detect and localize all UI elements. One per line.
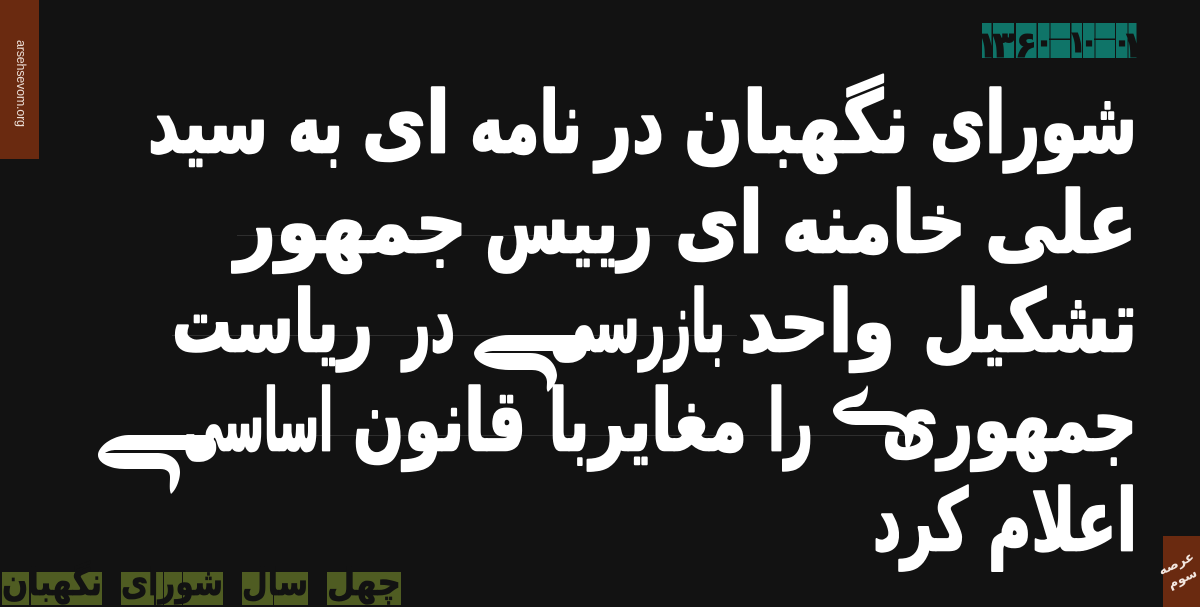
headline line 4 (183, 372, 1137, 471)
headline line 3: واحد (740, 273, 895, 372)
logo block: عرصه (1156, 549, 1197, 579)
date stamp: ۰ (1035, 25, 1053, 60)
date stamp: — (1094, 25, 1116, 50)
headline line 3: ریاست (172, 273, 373, 372)
date stamp: ۳ (993, 25, 1015, 66)
headline line 2: ای (675, 174, 763, 273)
headline line 1 (148, 74, 1137, 173)
headline line 5: کرد (873, 472, 968, 571)
headline line 5 (873, 472, 1137, 571)
headline line 1: ای (362, 74, 450, 173)
headline line 3: بازرسی (550, 273, 725, 372)
side tab: website (0, 0, 39, 159)
logo block (1156, 536, 1200, 607)
series title: olive blocks: شورای (121, 560, 223, 604)
date stamp: ۱ (976, 25, 998, 66)
swash: line 3 (474, 335, 590, 392)
date stamp: — (1049, 25, 1071, 50)
headline line 4: را (768, 372, 813, 471)
headline line 1: به (288, 74, 343, 173)
headline line 2: رییس (485, 174, 653, 273)
headline line 2: جمهور (232, 174, 467, 273)
swash: line 4 left (98, 435, 210, 494)
date stamp: ۶ (1015, 25, 1037, 66)
series title: olive blocks: چهل (327, 560, 401, 604)
date stamp: ۱ (1122, 25, 1143, 66)
headline line 4: با (549, 372, 589, 471)
headline line 3 (172, 273, 1137, 372)
headline line 1: در (593, 74, 664, 173)
headline line 3: در (401, 273, 455, 372)
series title: olive blocks: نگهبان (2, 560, 102, 604)
headline line 1: نامه (470, 74, 582, 173)
swash: line 4 middle (833, 385, 914, 450)
date stamp: ۰ (1113, 25, 1131, 60)
logo block: سوم (1166, 566, 1200, 592)
headline line 3: تشکیل (923, 273, 1137, 372)
date stamp: ۱ (1068, 25, 1086, 60)
headline line 4: اساسی (183, 372, 333, 471)
date stamp: ۰ (1080, 25, 1098, 60)
headline line 2: علی (985, 174, 1137, 273)
headline (148, 74, 1137, 571)
series title: olive blocks: سال (242, 560, 308, 604)
headline line 5: اعلام (988, 472, 1137, 571)
side tab: website: arsehsevom.org (14, 40, 28, 127)
headline line 4: مغایر (587, 372, 747, 471)
series title: olive blocks (2, 560, 401, 605)
date stamp (976, 23, 1143, 66)
headline line 2 (232, 174, 1137, 273)
headline line 1: نگهبان (684, 74, 909, 173)
headline line 2: خامنه (782, 174, 966, 273)
headline line 1: سید (148, 74, 268, 173)
headline line 4: قانون (353, 372, 526, 471)
